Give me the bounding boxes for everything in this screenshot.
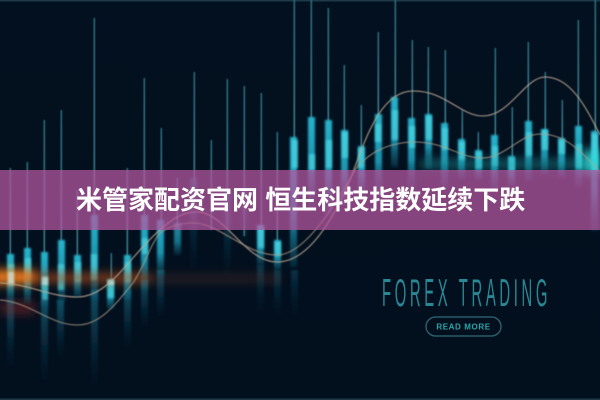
candle highlights — [8, 110, 598, 300]
glow: teal horizon — [420, 150, 600, 174]
forex trading heading: FOREX TRADING — [382, 272, 551, 315]
long fading candle reflections — [7, 265, 298, 390]
wave curves — [0, 77, 600, 325]
read more button — [426, 317, 501, 336]
title banner: 米管家配资官网 恒生科技指数延续下跌 — [76, 185, 525, 215]
title banner — [0, 170, 600, 230]
read more button: READ MORE — [436, 322, 491, 332]
candlesticks: left group — [7, 137, 297, 309]
wicks — [10, 0, 596, 283]
candle cores over flare — [8, 272, 114, 285]
candlesticks: right group — [308, 97, 598, 231]
glow: orange flare — [0, 270, 280, 314]
